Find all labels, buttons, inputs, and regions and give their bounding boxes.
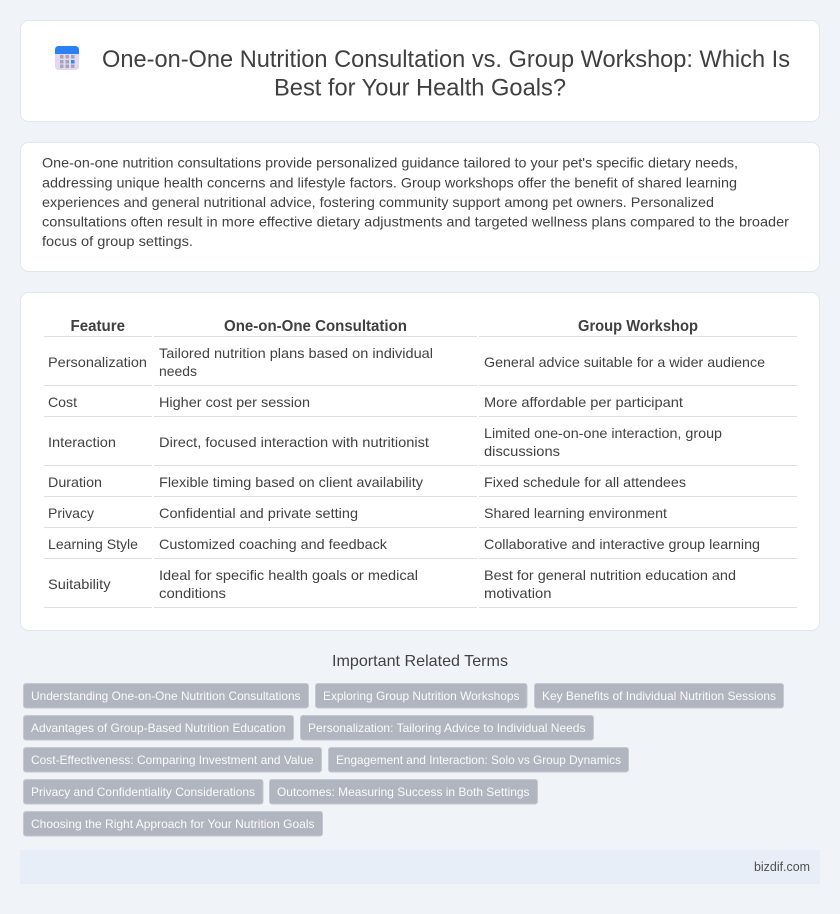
row: cost: More affordable per participant [484, 394, 683, 410]
row: learning style: Customized coaching and feedback [159, 536, 388, 552]
footer bar: bizdif.com [754, 859, 810, 874]
tag [316, 684, 527, 708]
panel: title card [20, 20, 820, 122]
tag [24, 716, 294, 740]
table header row: Group Workshop [578, 318, 698, 335]
tag: Outcomes: Measuring Success in Both Settings [277, 785, 530, 799]
row: privacy: Confidential and private setting [159, 505, 358, 521]
summary paragraph: focus of group settings. [42, 233, 193, 249]
row: interaction: discussions [484, 443, 560, 459]
table header row: One-on-One Consultation [224, 318, 407, 335]
panel: comparison table card [20, 292, 820, 630]
tag: Privacy and Confidentiality Considerations [31, 785, 255, 799]
row: cost [48, 394, 683, 410]
row: personalization: General advice suitable for a wider audience [484, 354, 765, 370]
panel: related term tags [24, 684, 784, 836]
tag: Exploring Group Nutrition Workshops [323, 689, 520, 703]
row: interaction: Direct, focused interaction with nutritionist [159, 434, 429, 450]
row: personalization: Personalization [48, 354, 147, 370]
row: learning style: Learning Style [48, 536, 138, 552]
title: One-on-One Nutrition Consultation vs. Group Workshop: Which Is [102, 46, 790, 73]
row: suitability: Best for general nutrition education and [484, 567, 736, 583]
row: privacy: Privacy [48, 505, 94, 521]
tag [24, 684, 308, 708]
row: duration: Fixed schedule for all attendees [484, 474, 686, 490]
row: duration: Duration [48, 474, 102, 490]
row: personalization [48, 345, 765, 379]
row: cost: Cost [48, 394, 77, 410]
row: duration [48, 474, 686, 490]
tag [24, 812, 322, 836]
row: duration: Flexible timing based on client availability [159, 474, 423, 490]
row: suitability: motivation [484, 585, 552, 601]
summary paragraph: One-on-one nutrition consultations provide personalized guidance tailored to your pet's specific dietary needs, [42, 154, 738, 170]
title [102, 46, 790, 102]
row: personalization: needs [159, 363, 197, 379]
tag [328, 748, 628, 772]
tag [24, 748, 322, 772]
table header row: Feature [70, 318, 125, 335]
tag: Cost-Effectiveness: Comparing Investment and Value [31, 753, 314, 767]
tag: Choosing the Right Approach for Your Nutrition Goals [31, 817, 314, 831]
summary paragraph: addressing unique health concerns and lifestyle factors. Group workshops offer the benefit of shared learning [42, 174, 737, 190]
panel: summary text card [20, 142, 820, 272]
tag [270, 780, 538, 804]
row: learning style [48, 536, 760, 552]
tag: Personalization: Tailoring Advice to Individual Needs [308, 721, 586, 735]
heading: important related terms: Important Related Terms [332, 653, 508, 670]
row: personalization: Tailored nutrition plans based on individual [159, 345, 433, 361]
tag: Engagement and Interaction: Solo vs Group Dynamics [336, 753, 621, 767]
tag: Key Benefits of Individual Nutrition Sessions [542, 689, 776, 703]
icon: calendar [55, 46, 79, 70]
row: privacy [48, 505, 667, 521]
row: suitability: conditions [159, 585, 226, 601]
row: privacy: Shared learning environment [484, 505, 667, 521]
row: cost: Higher cost per session [159, 394, 310, 410]
row: suitability [48, 567, 736, 601]
footer bar [20, 850, 820, 884]
summary paragraph [42, 154, 789, 249]
tag: Advantages of Group-Based Nutrition Education [31, 721, 286, 735]
row: interaction: Limited one-on-one interaction, group [484, 425, 722, 441]
summary paragraph: experiences and general nutritional advice, fostering community support among pet owners. Personalized [42, 194, 714, 210]
tag [534, 684, 784, 708]
tag: Understanding One-on-One Nutrition Consultations [31, 689, 300, 703]
tag [300, 716, 594, 740]
table header row [70, 318, 698, 335]
summary paragraph: consultations often result in more effective dietary adjustments and targeted wellness plans compared to the broader [42, 214, 789, 230]
row: interaction: Interaction [48, 434, 116, 450]
tag [24, 780, 263, 804]
row: suitability: Ideal for specific health goals or medical [159, 567, 418, 583]
title: Best for Your Health Goals? [274, 74, 566, 102]
row: suitability: Suitability [48, 576, 110, 592]
row: learning style: Collaborative and interactive group learning [484, 536, 760, 552]
row: interaction [48, 425, 722, 459]
